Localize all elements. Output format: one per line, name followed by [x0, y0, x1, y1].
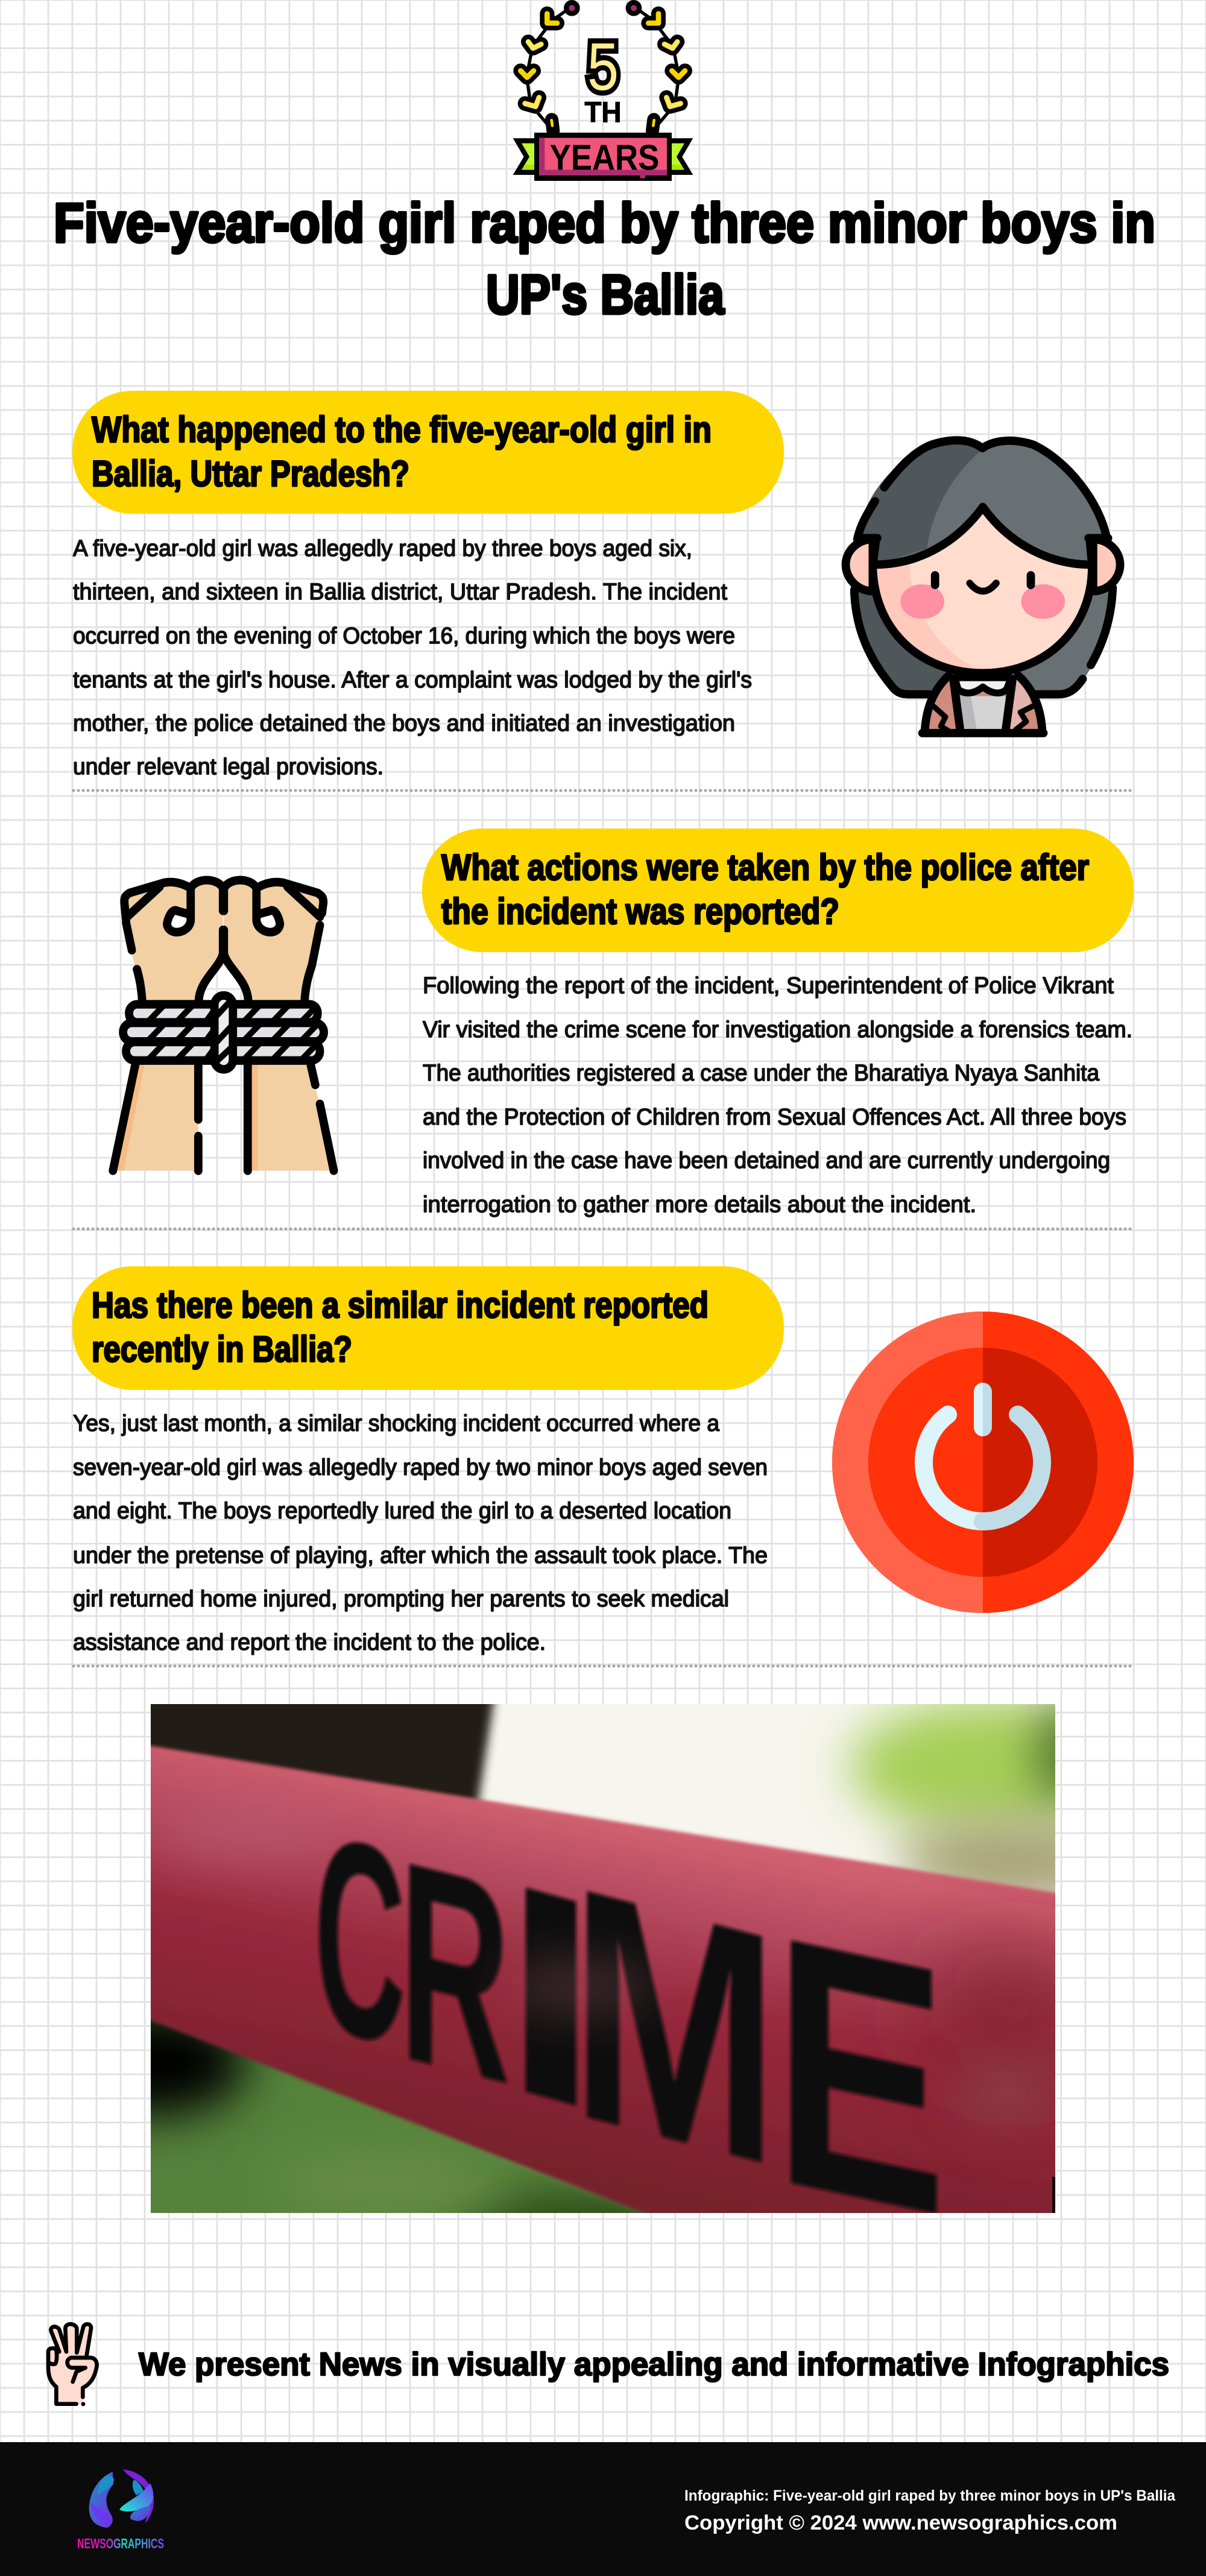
body text — [73, 1411, 768, 1655]
heading pill — [72, 1266, 784, 1390]
heading pill — [72, 391, 784, 514]
icon: 5th years badge — [513, 0, 693, 181]
body text: assistance and report the incident to the police. — [73, 1630, 546, 1655]
body text: A five-year-old girl was allegedly raped by three boys aged six, — [73, 536, 692, 561]
body text: under the pretense of playing, after which the assault took place. The — [73, 1543, 768, 1568]
photo: crime tape — [151, 1704, 1055, 2213]
laurel right — [626, 0, 685, 131]
heading pill — [422, 829, 1134, 952]
ribbon label: YEARS — [550, 137, 659, 178]
footer caption: Infographic: Five-year-old girl raped by three minor boys in UP's Ballia — [684, 2487, 1176, 2504]
heading pill: What happened to the five-year-old girl in — [92, 409, 712, 450]
heading pill: the incident was reported? — [441, 891, 839, 932]
photo lettering: I — [502, 1817, 599, 2175]
tagline: We present News in visually appealing and informative Infographics — [139, 2346, 1169, 2382]
panel: similar incident — [72, 1266, 1134, 1655]
heading pill: recently in Ballia? — [92, 1329, 352, 1369]
icon: tied hands — [113, 880, 333, 1170]
footer copyright: Copyright © 2024 www.newsographics.com — [684, 2511, 1117, 2534]
icon: girl — [846, 440, 1120, 733]
body text: under relevant legal provisions. — [73, 754, 384, 780]
body text: tenants at the girl's house. After a complaint was lodged by the girl's — [73, 668, 752, 693]
body text: involved in the case have been detained and are currently undergoing — [423, 1148, 1110, 1173]
photo lettering: C — [314, 1777, 406, 2104]
divider — [74, 1664, 1134, 1668]
body text: and eight. The boys reportedly lured the girl to a deserted location — [73, 1498, 731, 1524]
body text: interrogation to gather more details about the incident. — [423, 1192, 976, 1217]
body text: Following the report of the incident, Superintendent of Police Vikrant — [423, 973, 1114, 999]
photo lettering: R — [399, 1799, 510, 2144]
body text — [423, 973, 1132, 1217]
body text: seven-year-old girl was allegedly raped by two minor boys aged seven — [73, 1455, 768, 1480]
body text: Vir visited the crime scene for investigation alongside a forensics team. — [423, 1017, 1132, 1043]
body text: thirteen, and sixteen in Ballia district, Uttar Pradesh. The incident — [73, 579, 727, 605]
panel: what happened — [72, 391, 1120, 780]
laurel left — [520, 0, 580, 131]
heading pill: What actions were taken by the police after — [441, 847, 1089, 888]
heading pill: Has there been a similar incident reported — [92, 1285, 709, 1325]
photo lettering — [317, 1840, 939, 2213]
heading pill: Ballia, Uttar Pradesh? — [92, 453, 409, 494]
badge ordinal: TH — [584, 97, 622, 129]
divider — [74, 1228, 1134, 1230]
icon: power button — [832, 1312, 1134, 1613]
title: UP's Ballia — [486, 264, 725, 326]
body text: girl returned home injured, prompting her parents to seek medical — [73, 1586, 729, 1612]
body text: The authorities registered a case under the Bharatiya Nyaya Sanhita — [423, 1061, 1100, 1086]
badge numeral: 5 — [587, 29, 619, 104]
icon: hand showing three — [48, 2324, 97, 2404]
body text — [73, 536, 752, 780]
body text: and the Protection of Children from Sexual Offences Act. All three boys — [423, 1105, 1126, 1130]
logo wordmark: NEWSOGRAPHICS — [77, 2536, 164, 2551]
body text: occurred on the evening of October 16, during which the boys were — [73, 623, 735, 649]
body text: Yes, just last month, a similar shocking incident occurred where a — [73, 1411, 720, 1436]
title — [54, 192, 1155, 326]
divider — [74, 789, 1134, 792]
photo lettering: E — [774, 1860, 947, 2291]
logo: newsographics globe — [89, 2469, 154, 2528]
ribbon — [513, 133, 693, 181]
footer bar — [0, 2442, 1206, 2576]
panel: police actions — [113, 829, 1134, 1217]
body text: mother, the police detained the boys and initiated an investigation — [73, 711, 735, 736]
photo lettering: M — [570, 1816, 778, 2237]
